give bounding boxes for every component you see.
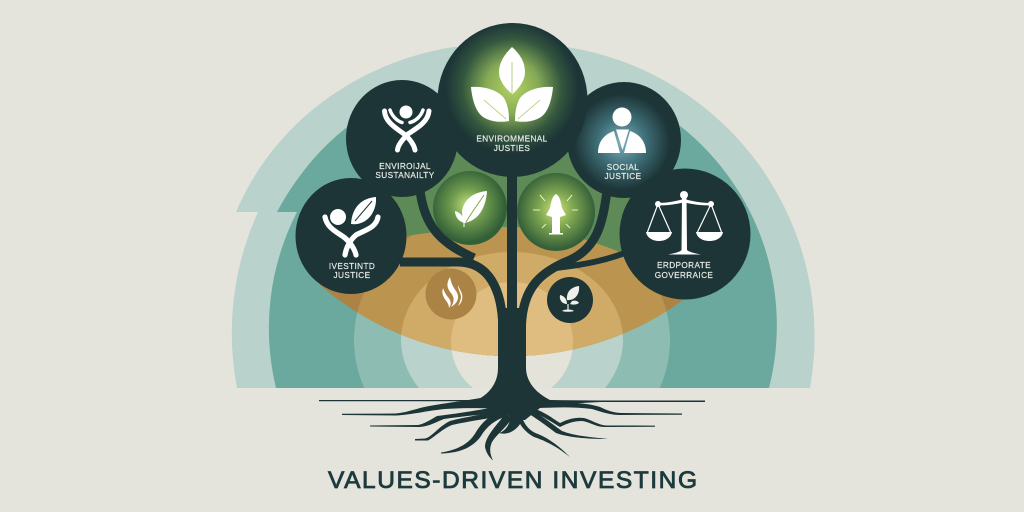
panel: social justice — [567, 82, 681, 198]
root left 2 — [370, 406, 504, 427]
band 3 — [452, 350, 572, 388]
icon: leaf — [455, 191, 487, 227]
label: JUSTICE — [334, 271, 371, 280]
panel: invested justice — [296, 178, 406, 294]
central stem — [507, 165, 517, 325]
icon: beacon figure — [533, 194, 578, 234]
root centre — [499, 410, 526, 434]
panel: environmental justice — [438, 23, 588, 177]
panel: corporate governance — [620, 168, 750, 300]
trunk — [440, 308, 590, 420]
label: SOCIAL — [607, 163, 639, 172]
label: JUSTIES — [494, 144, 530, 153]
small circle: sprout — [547, 277, 593, 323]
tan dome — [320, 227, 684, 356]
left lower branch — [400, 262, 502, 320]
icon: person in suit — [598, 108, 646, 153]
root line right top — [540, 400, 705, 405]
label: ERDPORATE — [657, 261, 711, 270]
root left 1 — [342, 394, 505, 416]
label: IVESTINTD — [329, 262, 375, 271]
icon: scales — [646, 191, 723, 254]
root line left top — [319, 400, 480, 401]
tree — [319, 165, 705, 460]
left upper branch — [420, 190, 474, 258]
tan band 2 — [401, 252, 622, 356]
small circle: left green leaf — [433, 171, 507, 245]
arch backdrop — [232, 47, 814, 388]
icon: person with leaf — [325, 197, 378, 255]
icon: three leaves — [471, 47, 553, 122]
root left 3 — [415, 410, 507, 440]
root left 5 — [485, 414, 512, 460]
label: GOVERRAICE — [655, 271, 713, 280]
small circle: flame — [426, 268, 476, 320]
icon: person with arms raised — [384, 106, 429, 150]
middle teal arch — [268, 125, 777, 388]
root left 4 — [441, 411, 507, 454]
band 2 — [401, 334, 623, 388]
label: ENVIROMMENAL — [476, 134, 548, 144]
green canopy zone — [385, 150, 640, 262]
label: ENVIROIJAL — [379, 162, 431, 171]
outer light teal arch — [232, 47, 815, 388]
label: JUSTICE — [605, 172, 642, 181]
root right 4 — [516, 411, 570, 457]
label: SUSTANAILTY — [375, 171, 435, 180]
right lower branch — [556, 251, 630, 268]
root right 3 — [526, 408, 608, 439]
tan base — [320, 227, 684, 356]
root right 2 — [528, 407, 655, 427]
icon: sprout — [560, 286, 579, 312]
title: VALUES-DRIVEN INVESTING — [328, 467, 697, 494]
panel: environmental sustainability — [346, 80, 458, 197]
small circle: right green figure — [517, 173, 595, 251]
root right 1 — [530, 402, 682, 415]
tan band 1 — [358, 227, 666, 356]
tan band 3 — [451, 282, 573, 356]
icon: flame — [442, 277, 462, 308]
right upper branch — [522, 190, 607, 325]
band 1 — [354, 312, 670, 388]
